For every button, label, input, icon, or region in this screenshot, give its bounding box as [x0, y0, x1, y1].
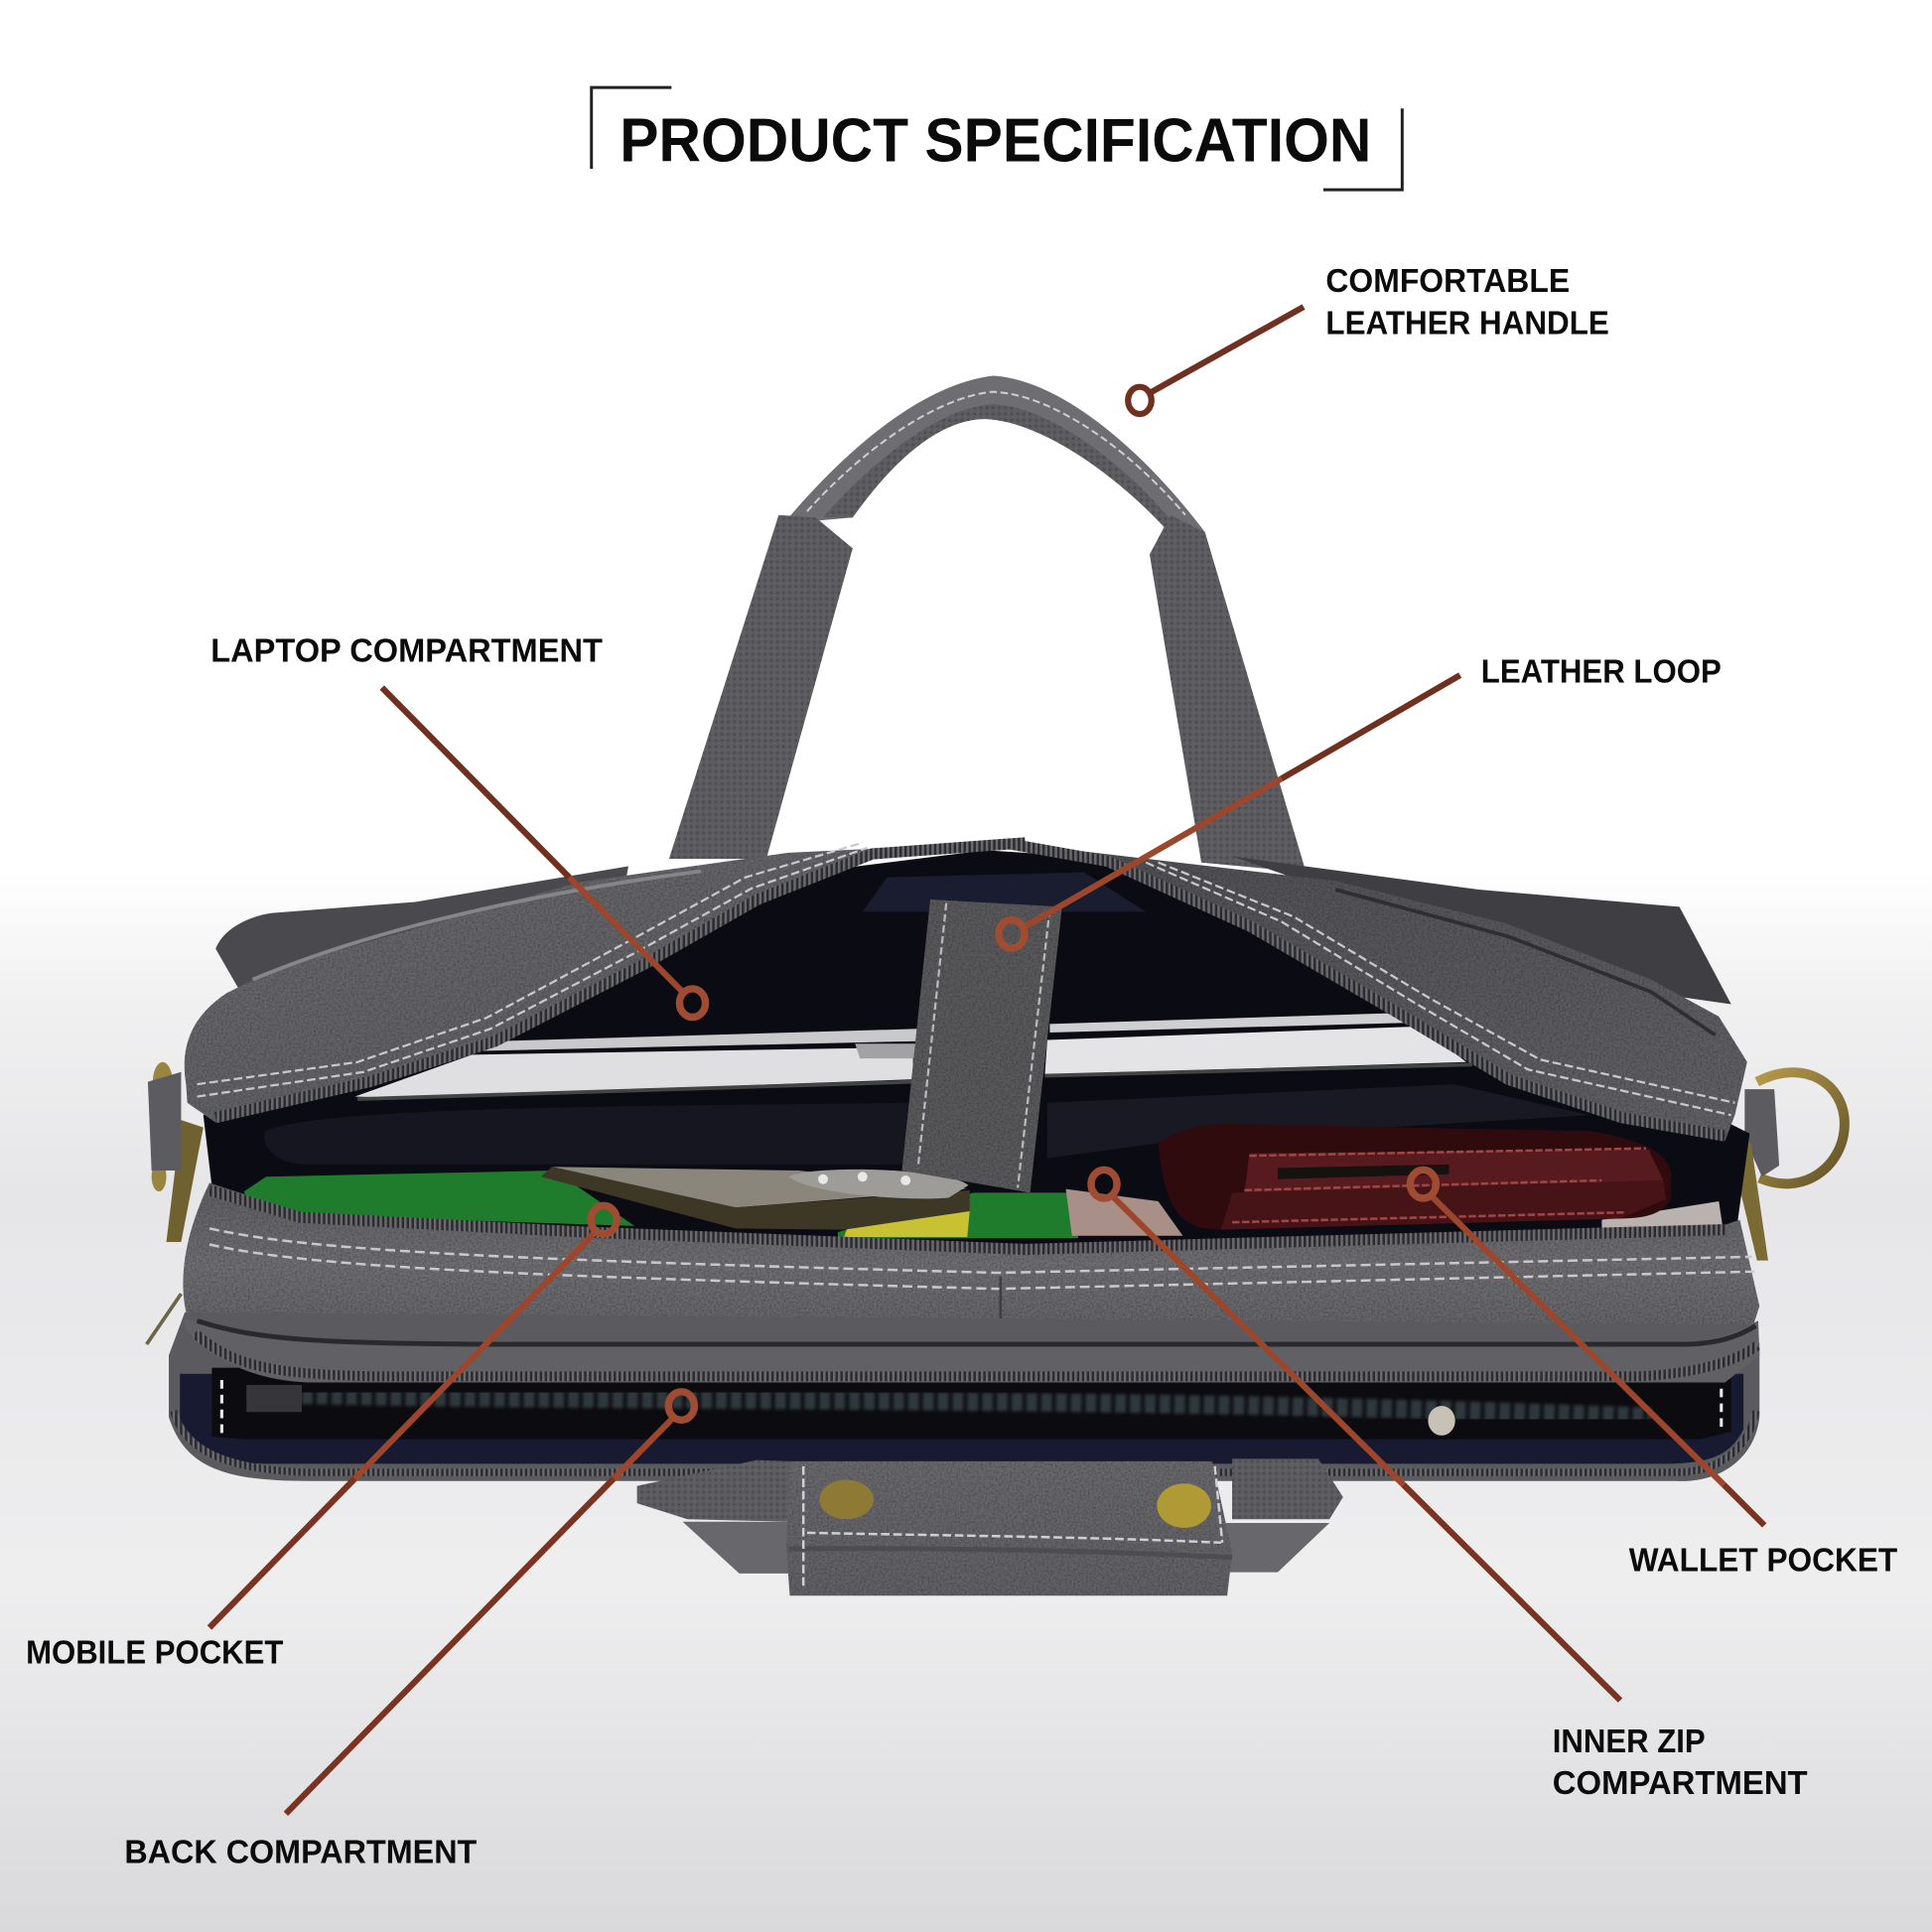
green book [244, 1171, 1723, 1238]
handle pad [786, 1461, 1232, 1595]
laptop face [354, 1047, 913, 1098]
pale book [1066, 1189, 1182, 1236]
leader line [1724, 1484, 1764, 1525]
front zipper [209, 1190, 1725, 1249]
label [1325, 263, 1609, 342]
pin [147, 1294, 181, 1344]
navy pouch [264, 1103, 911, 1165]
brass d-ring [1757, 1072, 1845, 1183]
top handle: leather arch [783, 376, 1205, 532]
pad stitching [803, 1466, 1222, 1589]
left leather wedge [683, 1522, 794, 1574]
label: LAPTOP COMPARTMENT [210, 632, 603, 669]
flap piping [252, 871, 701, 980]
laptop shadow edge [357, 1064, 1472, 1099]
leader line on bag [1431, 1195, 1724, 1484]
right flap [1011, 843, 1747, 1141]
wallet [1159, 1124, 1671, 1230]
leather tab [1744, 1089, 1779, 1176]
label: LEATHER HANDLE [1325, 305, 1609, 342]
leader line [1282, 675, 1460, 778]
leader line on bag [614, 1417, 674, 1478]
callout: comfortable leather handle [1128, 263, 1609, 414]
leather loop strap [901, 899, 1062, 1192]
laptop bag illustration [147, 376, 1845, 1595]
label: COMFORTABLE [1325, 263, 1570, 300]
leader line on bag [1023, 778, 1282, 928]
right leather wedge [1226, 1523, 1329, 1573]
label: MOBILE POCKET [26, 1634, 284, 1671]
marker [1410, 1170, 1436, 1198]
laptop [354, 1013, 1472, 1099]
navy top lining [863, 873, 1146, 911]
brass rivet [153, 1062, 173, 1102]
laptop lid strip [475, 1029, 918, 1051]
leader line [1150, 307, 1304, 393]
title bracket bottom-right [1323, 108, 1402, 190]
title block [592, 87, 1402, 190]
callout: wallet pocket [1410, 1170, 1898, 1579]
phone surface [552, 1167, 967, 1207]
leader line on bag [354, 1231, 597, 1478]
camera module [788, 1170, 968, 1198]
callout: inner zip compartment [1091, 1170, 1808, 1802]
label: WALLET POCKET [1629, 1542, 1898, 1579]
loop stitching [918, 903, 1049, 1187]
right webbing [1232, 1458, 1343, 1519]
leader line [1404, 1484, 1620, 1701]
handle stitching [807, 392, 1185, 515]
black folio [211, 1368, 1731, 1440]
bottom handle [637, 1458, 1343, 1595]
navy lining [180, 1374, 1743, 1463]
flap zipper [1011, 844, 1725, 1136]
back compartment [169, 1312, 1759, 1481]
handle inner webbing [823, 404, 1173, 527]
left side strap hardware [147, 1062, 204, 1344]
front pocket leather panel [183, 1182, 1759, 1345]
dark interior [204, 850, 1749, 1269]
leader line on bag [569, 878, 684, 993]
callout: leather loop [999, 654, 1722, 948]
piping [198, 1320, 1756, 1344]
smartphone [541, 1167, 970, 1230]
pad fold [788, 1549, 1232, 1558]
rear roll left [215, 866, 628, 998]
right side strap hardware [1728, 1072, 1845, 1261]
label: INNER ZIP [1553, 1724, 1706, 1760]
brass clip [167, 1120, 204, 1242]
outer zip border [169, 1312, 1759, 1481]
brass snap right [1157, 1483, 1211, 1528]
phone edge [541, 1167, 970, 1230]
upper band [185, 1318, 1759, 1382]
marker [668, 1392, 694, 1420]
left webbing [637, 1460, 790, 1522]
left webbing strap [669, 515, 853, 859]
callout: mobile pocket [26, 1205, 617, 1671]
marker [679, 989, 706, 1018]
leader line [382, 688, 569, 878]
centre seam [1000, 1277, 1002, 1340]
flap stitching [198, 843, 863, 1084]
upper zipper [195, 1333, 1757, 1376]
marker [1128, 387, 1152, 414]
leather tab [148, 1072, 181, 1171]
callout: back compartment [124, 1392, 694, 1870]
marker [591, 1205, 617, 1234]
leader line [286, 1478, 614, 1814]
yellow label [844, 1211, 970, 1237]
flap zipper [215, 843, 1026, 1118]
leader line on bag [1111, 1195, 1404, 1484]
marker [1091, 1170, 1117, 1198]
marker [999, 919, 1025, 948]
callout: laptop compartment [210, 632, 706, 1018]
folio stitching [221, 1374, 1722, 1437]
leader line [209, 1478, 354, 1627]
label [1553, 1724, 1808, 1802]
title: PRODUCT SPECIFICATION [620, 107, 1371, 176]
flap piping [1335, 890, 1716, 1035]
brass snap left [819, 1480, 874, 1519]
flap stitching [1146, 863, 1731, 1115]
title bracket top-left [592, 87, 671, 169]
right webbing strap [1150, 515, 1307, 873]
label: BACK COMPARTMENT [124, 1834, 478, 1870]
silver rivet [1428, 1406, 1455, 1436]
left flap [185, 842, 1026, 1123]
lower zipper [174, 1411, 1756, 1472]
label: COMPARTMENT [1553, 1765, 1808, 1802]
brass clip [1728, 1142, 1768, 1261]
folio embossing [302, 1395, 1651, 1417]
label: LEATHER LOOP [1481, 654, 1722, 691]
front stitching [209, 1228, 1752, 1273]
rear roll right [1232, 857, 1731, 1004]
